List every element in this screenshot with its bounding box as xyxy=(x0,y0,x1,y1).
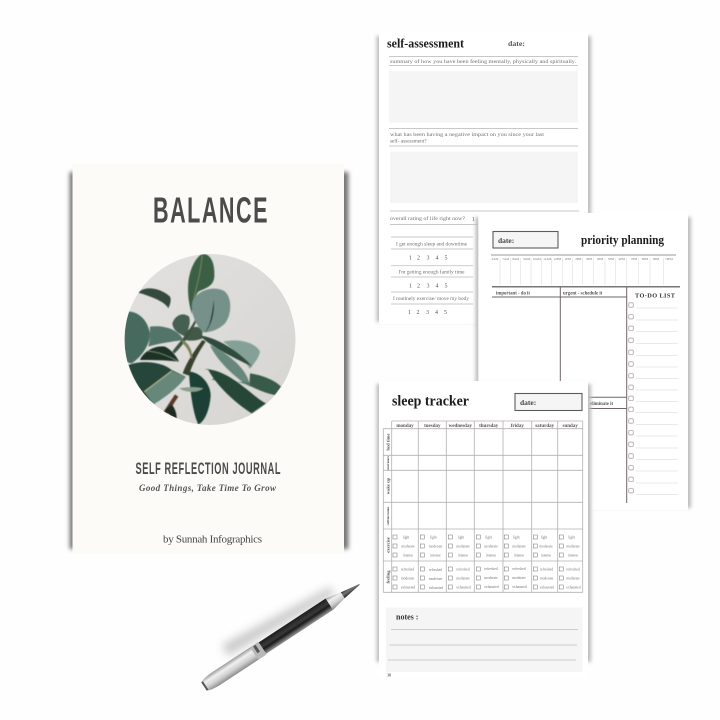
feeling checkboxes: refreshed xyxy=(456,568,470,572)
exercise checkboxes: intense xyxy=(541,554,551,558)
hourly timeline: 2PM xyxy=(575,257,582,261)
weekly grid: bed time xyxy=(385,434,390,450)
exercise checkboxes: light xyxy=(513,536,520,540)
feeling checkboxes: moderate xyxy=(566,576,580,580)
feeling checkboxes: exhausted xyxy=(429,586,443,590)
photo: rubber plant in circle xyxy=(124,254,296,425)
rating: family time: I'm getting enough family time xyxy=(398,268,465,276)
question two: self- assessment? xyxy=(390,138,427,144)
exercise checkboxes xyxy=(393,535,580,558)
rating: family time: 2 xyxy=(417,284,420,290)
hourly timeline: 1PM xyxy=(565,257,571,261)
hourly timeline: 8AM xyxy=(512,257,519,261)
page number: 38 xyxy=(387,672,391,678)
feeling checkboxes: refreshed xyxy=(512,567,526,571)
tagline: Good Things, Take Time To Grow xyxy=(139,483,277,493)
date box: date: xyxy=(520,398,536,407)
rating: sleep: 1 xyxy=(409,256,412,262)
panel: self-assessment page xyxy=(376,32,591,324)
notes box xyxy=(386,608,582,672)
exercise checkboxes: intense xyxy=(403,554,413,558)
icon: silver and black pen xyxy=(200,578,364,693)
title: BALANCE: BALANCE xyxy=(153,191,267,231)
exercise checkboxes: intense xyxy=(458,554,468,558)
exercise checkboxes: light xyxy=(541,536,547,540)
answer box two xyxy=(390,152,578,203)
feeling checkboxes: exhausted xyxy=(401,586,415,590)
to-do list: TO-DO LIST xyxy=(635,292,676,300)
heading: priority planning: priority planning xyxy=(581,233,665,247)
feeling checkboxes: moderate xyxy=(512,576,526,580)
weekly grid: thursday xyxy=(479,424,499,429)
hourly timeline xyxy=(492,257,673,285)
date box xyxy=(515,394,582,410)
feeling checkboxes: refreshed xyxy=(540,568,553,572)
weekly grid: tuesday xyxy=(424,424,441,429)
exercise checkboxes: light xyxy=(568,536,575,540)
date box: date: xyxy=(498,236,514,245)
panel: priority planning page xyxy=(476,213,691,510)
rating: sleep xyxy=(391,237,473,262)
exercise checkboxes: intense xyxy=(486,554,496,558)
rating: exercise: 3 xyxy=(426,310,429,316)
hourly timeline: 10PM xyxy=(665,257,673,261)
feeling checkboxes: refreshed xyxy=(566,568,580,572)
feeling checkboxes: moderate xyxy=(484,576,498,580)
quadrant grid: urgent - schedule it xyxy=(563,292,603,296)
to-do list xyxy=(629,292,678,494)
hourly timeline: 6PM xyxy=(619,257,625,261)
exercise checkboxes: light xyxy=(430,536,437,540)
overall rating: overall rating of life right now? xyxy=(390,215,466,222)
heading: sleep tracker: sleep tracker xyxy=(392,394,470,410)
hourly timeline: 11AM xyxy=(543,257,552,261)
hourly timeline: 4PM xyxy=(597,257,603,261)
hourly timeline: 6AM xyxy=(492,257,499,261)
exercise checkboxes: moderate xyxy=(429,544,443,548)
hourly timeline: 5PM xyxy=(608,257,614,261)
notes box: notes : xyxy=(396,612,418,622)
exercise checkboxes: light xyxy=(458,536,464,540)
date label: date: xyxy=(508,39,525,48)
exercise checkboxes: intense xyxy=(568,554,578,558)
exercise checkboxes: moderate xyxy=(484,544,498,548)
feeling checkboxes: exhausted xyxy=(484,585,499,589)
exercise checkboxes: moderate xyxy=(539,544,553,548)
quadrant grid xyxy=(492,287,680,503)
feeling checkboxes xyxy=(393,567,581,590)
hourly timeline: 7AM xyxy=(502,257,509,261)
feeling checkboxes: exhausted xyxy=(540,586,554,590)
rating: exercise: 2 xyxy=(416,310,420,316)
weekly grid: monday xyxy=(396,424,414,429)
date box xyxy=(493,232,558,248)
weekly grid: exercise xyxy=(385,537,390,553)
rating: sleep: 2 xyxy=(417,256,420,262)
weekly grid: wednesday xyxy=(449,424,472,429)
rating: exercise: 5 xyxy=(444,310,447,316)
feeling checkboxes: exhausted xyxy=(512,585,527,589)
weekly grid: friday xyxy=(511,424,524,429)
rating: family time xyxy=(391,266,473,290)
exercise checkboxes: intense xyxy=(514,554,524,558)
rating: exercise: 1 xyxy=(408,310,411,316)
rating: family time: 3 xyxy=(426,284,430,290)
question two: what has been having a negative impact on you since your last xyxy=(390,132,545,138)
feeling checkboxes: moderate xyxy=(540,576,554,580)
weekly grid: saturday xyxy=(535,424,555,429)
overall rating: 1 xyxy=(472,217,475,223)
hourly timeline: 3PM xyxy=(586,257,592,261)
author: by Sunnah Infographics xyxy=(163,534,262,546)
hourly timeline: 7PM xyxy=(631,257,637,261)
feeling checkboxes: refreshed xyxy=(429,568,442,572)
hourly timeline: 12PM xyxy=(553,257,561,261)
exercise checkboxes: intense xyxy=(430,554,441,558)
feeling checkboxes: exhausted xyxy=(566,586,581,590)
rating: exercise: I routinely exercise/ move my body xyxy=(393,296,469,302)
rating: family time: 1 xyxy=(409,284,412,290)
panel: sleep tracker page xyxy=(376,381,591,678)
rating: family time: 4 xyxy=(436,284,438,290)
rating: family time: 5 xyxy=(444,284,448,290)
feeling checkboxes: moderate xyxy=(429,577,443,581)
hourly timeline: 8PM xyxy=(642,257,648,261)
weekly grid: caffeine intake xyxy=(386,506,390,525)
exercise checkboxes: moderate xyxy=(566,544,580,548)
question two xyxy=(389,128,578,146)
feeling checkboxes: refreshed xyxy=(401,568,414,572)
rating: sleep: 3 xyxy=(426,256,430,262)
feeling checkboxes: moderate xyxy=(401,576,415,580)
quadrant grid: eliminate it xyxy=(590,402,613,407)
hourly timeline: 10AM xyxy=(533,257,541,261)
rating: sleep: I get enough sleep and downtime xyxy=(396,242,468,248)
panel: journal cover xyxy=(70,164,348,553)
answer box one xyxy=(389,71,578,122)
exercise checkboxes: moderate xyxy=(401,544,415,548)
weekly grid: wake up xyxy=(385,477,390,494)
weekly grid xyxy=(383,421,583,592)
feeling checkboxes: exhausted xyxy=(456,586,471,590)
rating: sleep: 5 xyxy=(444,256,448,262)
weekly grid: sunday xyxy=(563,424,578,429)
overall rating xyxy=(390,211,579,224)
quadrant grid: important - do it xyxy=(496,292,530,296)
hourly timeline: 9AM xyxy=(523,257,530,261)
heading: self-assessment: self-assessment xyxy=(387,36,465,50)
exercise checkboxes: moderate xyxy=(456,544,470,548)
exercise checkboxes: light xyxy=(403,536,409,540)
weekly grid: feeling xyxy=(385,570,390,584)
exercise checkboxes: moderate xyxy=(512,544,526,548)
feeling checkboxes: moderate xyxy=(456,576,470,580)
rating: exercise: 4 xyxy=(435,310,438,316)
heading: self reflection journal: SELF REFLECTION JOURNAL xyxy=(136,459,281,478)
rating: sleep: 4 xyxy=(436,256,438,262)
feeling checkboxes: refreshed xyxy=(484,567,498,571)
weekly grid: total hours xyxy=(386,455,390,470)
hourly timeline: 9PM xyxy=(653,257,659,261)
exercise checkboxes: light xyxy=(485,536,492,540)
rating: exercise xyxy=(391,292,473,316)
question one: summary of how you have been feeling mentally, physically and spiritually. xyxy=(390,58,576,65)
